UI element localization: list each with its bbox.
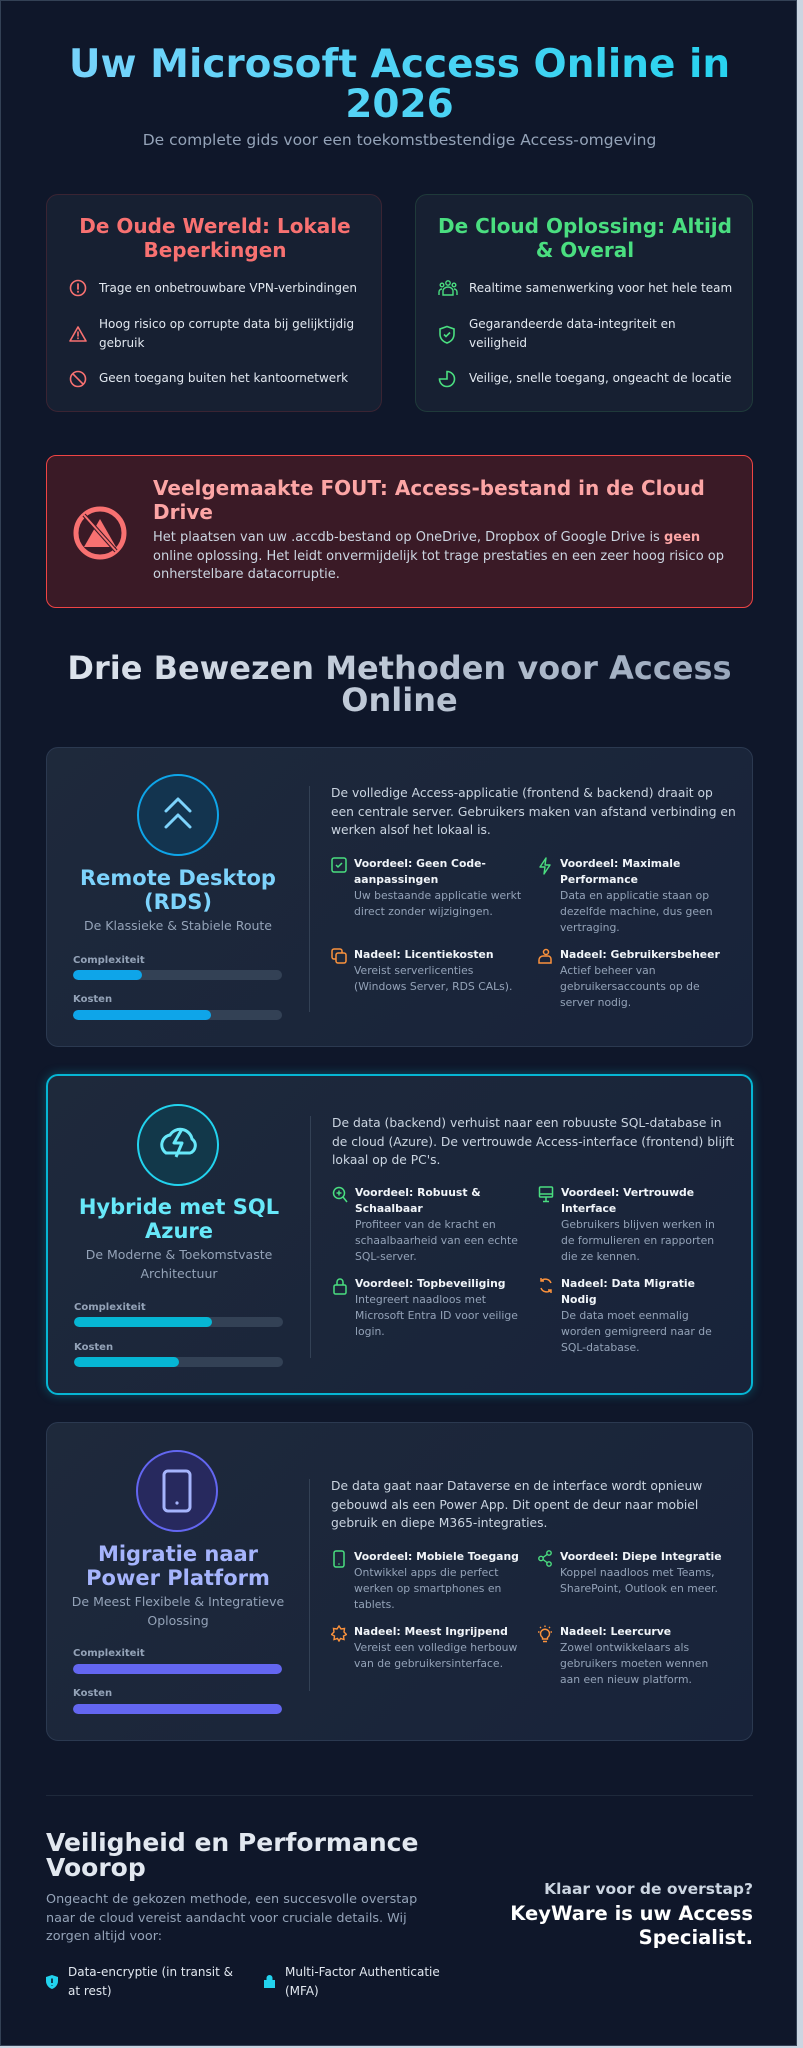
list: old world problems xyxy=(69,280,357,388)
pros and cons: SQL Azure: Voordeel: Robuust & Schaalbaar xyxy=(355,1186,481,1215)
heading: security: Veiligheid en Performance Voorop xyxy=(46,1828,418,1882)
call to action: Klaar voor de overstap? xyxy=(544,1880,753,1898)
bar chart: RDS: Kosten xyxy=(73,994,112,1005)
pros and cons: RDS: Actief beheer van gebruikersaccounts op de server nodig. xyxy=(560,964,700,1009)
pros and cons: power platform: Nadeel: Meest Ingrijpend xyxy=(354,1625,508,1638)
text: RDS description: De volledige Access-applicatie (frontend & backend) draait op een centrale server. Gebruikers maken van afstand verbinding en werken alsof het lokaal is. xyxy=(331,786,736,837)
call to action: KeyWare is uw Access Specialist. xyxy=(510,1902,753,1949)
card: remote desktop xyxy=(46,747,753,1047)
text: power platform description: De data gaat naar Dataverse en de interface wordt opnieuw gebouwd als een Power App. Dit opent de deur naar mobiel gebruik en diepe M365-integraties. xyxy=(331,1479,702,1530)
pros and cons: power platform: Vereist een volledige herbouw van de gebruikersinterface. xyxy=(354,1641,517,1670)
pros and cons: RDS: Nadeel: Gebruikersbeheer xyxy=(560,948,720,961)
pros and cons: RDS: Data en applicatie staan op dezelfde machine, dus geen vertraging. xyxy=(560,889,713,934)
list: cloud benefits: Realtime samenwerking voor het hele team xyxy=(469,281,732,295)
heading: cloud: De Cloud Oplossing: Altijd & Overal xyxy=(438,214,732,262)
pros and cons: SQL Azure: De data moet eenmalig worden gemigreerd naar de SQL-database. xyxy=(561,1309,712,1354)
pros and cons: RDS: Nadeel: Licentiekosten xyxy=(354,948,494,961)
text: SQL Azure description: De data (backend) verhuist naar een robuuste SQL-database in de cloud (Azure). De vertrouwde Access-interface (frontend) blijft lokaal op de PC's. xyxy=(332,1116,734,1167)
heading: old world: De Oude Wereld: Lokale Beperkingen xyxy=(79,214,351,262)
heading: RDS: Remote Desktop (RDS) xyxy=(80,866,276,914)
icon: no cloud warning xyxy=(74,506,126,560)
list: security features: Multi-Factor Authenticatie (MFA) xyxy=(285,1965,440,1998)
pros and cons: power platform xyxy=(331,1550,722,1686)
bar chart: SQL Azure: Kosten xyxy=(74,1342,113,1353)
pros and cons: RDS: Voordeel: Geen Code-aanpassingen xyxy=(354,857,486,886)
pros and cons: power platform: Zowel ontwikkelaars als gebruikers moeten wennen aan een nieuw platform. xyxy=(560,1641,708,1686)
list: security features: Data-encryptie (in transit & at rest) xyxy=(68,1965,233,1998)
bar chart: power platform: Kosten xyxy=(73,1688,112,1699)
pros and cons: SQL Azure xyxy=(332,1186,715,1354)
subtitle: De complete gids voor een toekomstbestendige Access-omgeving xyxy=(143,131,656,149)
pros and cons: SQL Azure: Nadeel: Data Migratie Nodig xyxy=(561,1277,695,1306)
pros and cons: power platform: Voordeel: Mobiele Toegang xyxy=(354,1550,519,1563)
icon: SQL Azure xyxy=(137,1104,219,1186)
list: cloud benefits: Veilige, snelle toegang, ongeacht de locatie xyxy=(469,371,732,385)
panel: old world xyxy=(46,194,382,412)
icon: power platform xyxy=(136,1450,218,1532)
card: power platform xyxy=(46,1422,753,1741)
pros and cons: power platform: Voordeel: Diepe Integratie xyxy=(560,1550,722,1563)
pros and cons: SQL Azure: Gebruikers blijven werken in de formulieren en rapporten die ze kennen. xyxy=(561,1218,715,1263)
pros and cons: RDS: Voordeel: Maximale Performance xyxy=(560,857,680,886)
pros and cons: RDS xyxy=(331,857,720,1009)
card: hybrid SQL Azure xyxy=(46,1074,753,1395)
text: mistake explanation: Het plaatsen van uw .accdb-bestand op OneDrive, Dropbox of Google Drive is geen online oplossing. Het leidt onvermijdelijk tot trage prestaties en een zeer hoog risico op onherstelbare datacorruptie. xyxy=(153,530,724,582)
heading: three methods: Drie Bewezen Methoden voor Access Online xyxy=(67,649,732,719)
panel: cloud solution xyxy=(415,194,753,412)
pros and cons: RDS: Uw bestaande applicatie werkt direct zonder wijzigingen. xyxy=(354,889,521,918)
pros and cons: power platform: Nadeel: Leercurve xyxy=(560,1625,671,1638)
list: old world problems: Trage en onbetrouwbare VPN-verbindingen xyxy=(99,281,357,295)
bar chart: SQL Azure xyxy=(74,1302,283,1367)
pros and cons: SQL Azure: Integreert naadloos met Microsoft Entra ID voor veilige login. xyxy=(355,1293,518,1338)
list: old world problems: Geen toegang buiten het kantoornetwerk xyxy=(99,371,348,385)
bar chart: power platform xyxy=(73,1648,282,1714)
heading: power platform: Migratie naar Power Platform xyxy=(86,1542,270,1590)
subtitle: SQL Azure: De Moderne & Toekomstvaste Architectuur xyxy=(86,1247,272,1281)
subtitle: power platform: De Meest Flexibele & Integratieve Oplossing xyxy=(72,1594,284,1628)
pros and cons: RDS: Vereist serverlicenties (Windows Server, RDS CALs). xyxy=(354,964,512,993)
list: cloud benefits: Gegarandeerde data-integriteit en veiligheid xyxy=(469,317,676,350)
text: security intro: Ongeacht de gekozen methode, een succesvolle overstap naar de cloud vereist aandacht voor cruciale details. Wij zorgen altijd voor: xyxy=(46,1892,417,1944)
bar chart: RDS: Complexiteit xyxy=(73,955,145,966)
heading: mistake: Veelgemaakte FOUT: Access-bestand in de Cloud Drive xyxy=(153,476,705,524)
title: Uw Microsoft Access Online in 2026 xyxy=(69,42,730,127)
heading: SQL Azure: Hybride met SQL Azure xyxy=(79,1195,279,1243)
bar chart: power platform: Complexiteit xyxy=(73,1648,145,1659)
icon: RDS xyxy=(137,774,219,856)
bar chart: SQL Azure: Complexiteit xyxy=(74,1302,146,1313)
list: old world problems: Hoog risico op corrupte data bij gelijktijdig gebruik xyxy=(99,317,354,350)
list: cloud benefits xyxy=(438,280,732,388)
pros and cons: SQL Azure: Profiteer van de kracht en schaalbaarheid van een echte SQL-server. xyxy=(355,1218,518,1263)
bar chart: RDS xyxy=(73,955,282,1020)
callout: common mistake xyxy=(46,455,753,608)
call to action xyxy=(510,1880,753,1949)
pros and cons: SQL Azure: Voordeel: Topbeveiliging xyxy=(355,1277,506,1290)
subtitle: RDS: De Klassieke & Stabiele Route xyxy=(84,918,272,933)
pros and cons: SQL Azure: Voordeel: Vertrouwde Interface xyxy=(561,1186,694,1215)
pros and cons: power platform: Koppel naadloos met Teams, SharePoint, Outlook en meer. xyxy=(560,1566,718,1595)
pros and cons: power platform: Ontwikkel apps die perfect werken op smartphones en tablets. xyxy=(354,1566,501,1611)
list: security features xyxy=(46,1965,440,1998)
